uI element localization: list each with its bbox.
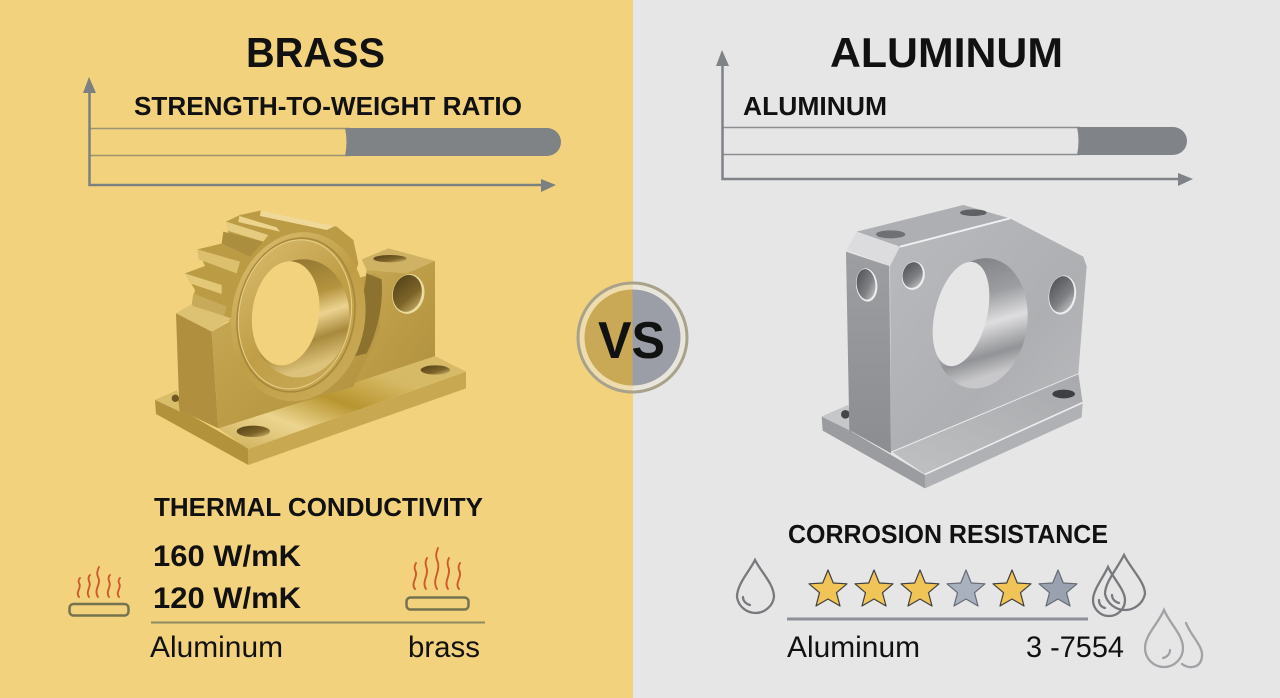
label: Aluminum: Aluminum <box>787 631 920 664</box>
chart: aluminum bar <box>716 50 1193 186</box>
bar track <box>723 128 1080 154</box>
value: 160 W/mK: 160 W/mK <box>153 540 301 573</box>
badge: VS <box>578 283 687 392</box>
bar value <box>1077 127 1187 155</box>
title: ALUMINUM: ALUMINUM <box>830 29 1063 76</box>
axes <box>83 77 556 192</box>
panel: aluminum <box>633 0 1280 698</box>
icon: water drop left <box>737 560 774 613</box>
label: Aluminum: Aluminum <box>150 631 283 664</box>
icon: heat plate left <box>70 567 128 616</box>
top face <box>857 205 1010 247</box>
main bore <box>923 251 1038 396</box>
icon: double water drops <box>1093 555 1145 616</box>
chart heading: ALUMINUM <box>743 91 887 121</box>
illustration: aluminum mounting block <box>822 205 1087 488</box>
divider line <box>787 618 1088 620</box>
label: 3 -7554: 3 -7554 <box>1026 631 1124 664</box>
right block <box>347 248 435 388</box>
base plate <box>155 356 466 465</box>
heading: CORROSION RESISTANCE <box>788 519 1108 549</box>
badge: VS: VS <box>598 312 665 370</box>
front face <box>890 218 1087 452</box>
icon: pale water drops <box>1145 610 1202 667</box>
chart: strength-to-weight ratio bar <box>83 77 561 192</box>
gear teeth <box>185 211 358 322</box>
ring collar with bore <box>218 221 379 412</box>
title: BRASS: BRASS <box>246 29 385 76</box>
side face <box>846 252 891 453</box>
bar value <box>345 128 561 156</box>
side holes <box>854 259 1079 317</box>
star rating <box>809 570 1077 606</box>
label: brass: brass <box>408 631 480 664</box>
top fillet highlight <box>847 232 900 266</box>
panel: brass <box>0 0 633 698</box>
base plate <box>822 373 1083 488</box>
divider line <box>151 622 485 624</box>
value: 120 W/mK: 120 W/mK <box>153 582 301 615</box>
section: thermal conductivity <box>70 492 485 664</box>
heading: THERMAL CONDUCTIVITY <box>154 492 483 522</box>
chart heading: STRENGTH-TO-WEIGHT RATIO <box>134 91 522 121</box>
bar track <box>90 128 350 156</box>
section: corrosion resistance <box>737 519 1202 667</box>
illustration: brass bearing block <box>155 211 466 465</box>
icon: heat plate right <box>406 548 468 610</box>
upright body <box>176 273 382 428</box>
axes <box>716 50 1193 186</box>
top screw holes <box>876 209 987 238</box>
